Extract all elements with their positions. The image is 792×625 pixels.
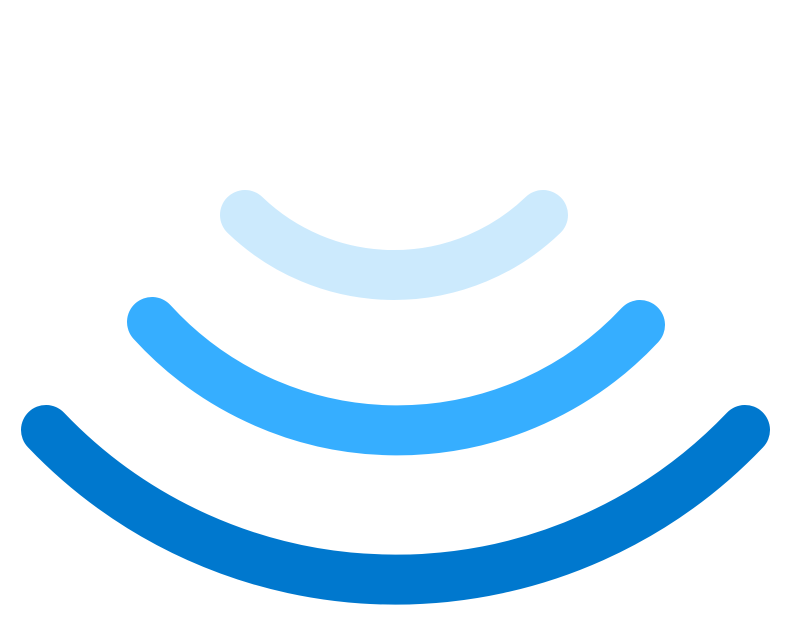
arc: large dark blue — [46, 430, 745, 580]
arc: medium blue — [152, 322, 640, 430]
arc: small light blue — [245, 215, 543, 275]
